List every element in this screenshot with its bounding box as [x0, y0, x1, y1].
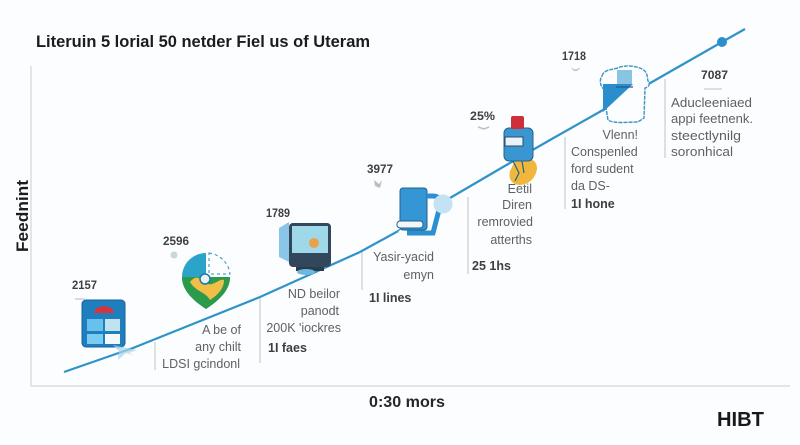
axes [31, 66, 790, 386]
milestone 1 tick [154, 342, 156, 370]
milestone 7 text: Aducleeniaed [671, 95, 752, 110]
milestone 2 text [266, 287, 341, 335]
milestone 6 text: Vlenn! [603, 128, 638, 142]
milestone 7 text: steectlynilg [671, 128, 741, 143]
milestone 1 text [162, 323, 242, 371]
milestone 5 duration: 25 1hs [472, 259, 511, 273]
milestone 6 duration: 1I hone [571, 197, 615, 211]
milestone 5 text: remrovied [477, 215, 533, 229]
milestone 5 icon: pack [478, 116, 537, 185]
milestone 2 text: ND beilor [288, 287, 340, 301]
brand mark: HIBT [717, 409, 764, 431]
milestone 7 text: appi feetnenk. [671, 111, 753, 126]
milestone 1 text: LDSI gcindonl [162, 357, 240, 371]
milestone 4 duration: 1I lines [369, 291, 411, 305]
milestone 4 tick [361, 252, 363, 290]
milestone 2 tick [259, 298, 261, 363]
milestone 5 value: 25% [470, 109, 495, 123]
end dot [717, 37, 727, 47]
milestone 7 text [671, 95, 753, 159]
milestone 2 text: 200K 'iockres [266, 321, 341, 335]
milestone 2 text: panodt [301, 304, 340, 318]
milestone 4 text: emyn [403, 268, 434, 282]
milestone 2 icon: pie shield [170, 252, 230, 309]
milestone 5 text: Diren [502, 198, 532, 212]
milestone 1 text: A be of [202, 323, 242, 337]
milestone 5 text: Eetil [508, 182, 532, 196]
milestone 4 icon: machine [374, 180, 452, 233]
milestone 4 text: Yasir-yacid [373, 250, 434, 264]
milestone 1 value: 2157 [72, 278, 97, 292]
milestone 1 icon: app panel [75, 299, 137, 360]
milestone 6 text [571, 128, 638, 193]
milestone 4 [362, 162, 452, 305]
milestone 1 [72, 278, 242, 371]
milestone 4 text [373, 250, 434, 282]
milestone 6 [562, 51, 649, 211]
milestone 5 text: atterths [490, 233, 532, 247]
milestone 6 text: da DS- [571, 179, 610, 193]
milestone 6 text: Conspenled [571, 145, 638, 159]
milestone 7 value: 7087 [701, 68, 728, 82]
milestone 3 [266, 208, 331, 275]
milestone 4 value: 3977 [367, 162, 393, 176]
milestone 2 [163, 234, 341, 363]
milestone 3 icon: device screen [279, 222, 331, 275]
growth line [64, 29, 745, 372]
milestone 3 value: 1789 [266, 208, 290, 220]
x axis label: 0:30 mors [369, 394, 445, 411]
milestone 7 [665, 68, 753, 159]
milestone 2 duration: 1I faes [268, 341, 307, 355]
milestone 1 text: any chilt [195, 340, 242, 354]
milestone 2 value: 2596 [163, 234, 189, 248]
milestone 5 tick [467, 197, 469, 274]
title: Literuin 5 lorial 50 netder Fiel us of Uteram [36, 33, 370, 51]
y axis label: Feednint [14, 179, 32, 252]
milestone 6 icon: cloud house [571, 66, 649, 122]
milestone 6 value: 1718 [562, 51, 587, 63]
milestone 6 text: ford sudent [571, 162, 634, 176]
milestone 7 tick [664, 79, 666, 158]
milestone 5 text [477, 182, 533, 247]
milestone 6 tick [564, 137, 566, 209]
milestone 7 text: soronhical [671, 144, 733, 159]
milestone 5 [468, 109, 537, 274]
